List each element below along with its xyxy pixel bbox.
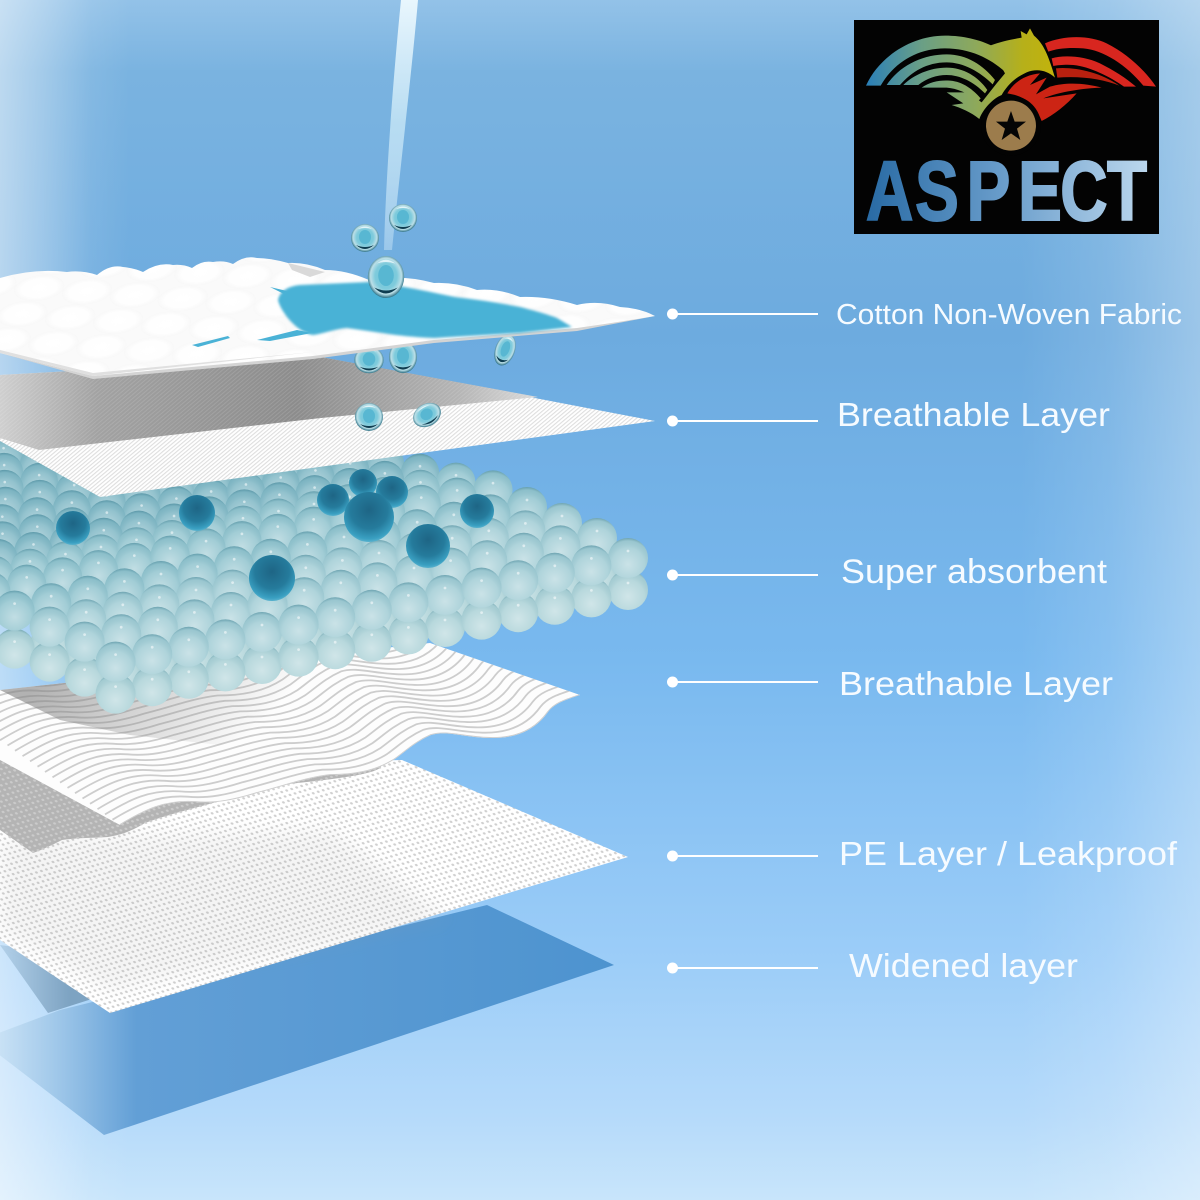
layer: super absorbent beads <box>0 384 648 714</box>
water stream <box>384 0 418 250</box>
wave shadow on PE layer <box>0 745 381 853</box>
layer: cotton non-woven fabric <box>0 257 655 379</box>
callout: super absorbent <box>667 553 1108 591</box>
layer: PE leakproof sheet <box>0 760 628 1013</box>
water puddle <box>192 282 572 347</box>
lower water drops <box>354 332 520 432</box>
callout: super absorbent: Super absorbent <box>841 553 1108 591</box>
layer: breathable hatched sheet <box>0 357 655 497</box>
callout: PE layer <box>667 835 1178 872</box>
callout: widened layer: Widened layer <box>849 947 1078 984</box>
callout: breathable layer <box>667 396 1110 433</box>
callout: cotton non-woven fabric: Cotton Non-Woven Fabric <box>836 299 1182 331</box>
callout: breathable layer 2 <box>667 665 1113 702</box>
callout: breathable layer: Breathable Layer <box>837 396 1110 433</box>
callout: cotton non-woven fabric <box>667 299 1182 331</box>
saturated dark beads <box>56 469 494 601</box>
beads: lower rows <box>0 525 648 714</box>
logo emblem: eagle <box>866 28 1156 156</box>
callout: breathable layer 2: Breathable Layer <box>839 665 1113 702</box>
logo wordmark: ASPECT <box>866 144 1147 238</box>
upper water drops <box>351 204 417 298</box>
layer: wavy breathable layer <box>0 643 580 825</box>
beads: upper rows <box>0 384 648 682</box>
callout: PE layer: PE Layer / Leakproof <box>839 835 1178 872</box>
layer: widened blue base layer <box>0 905 614 1135</box>
logo: ASPECT <box>854 20 1159 238</box>
callout: widened layer <box>667 947 1078 984</box>
